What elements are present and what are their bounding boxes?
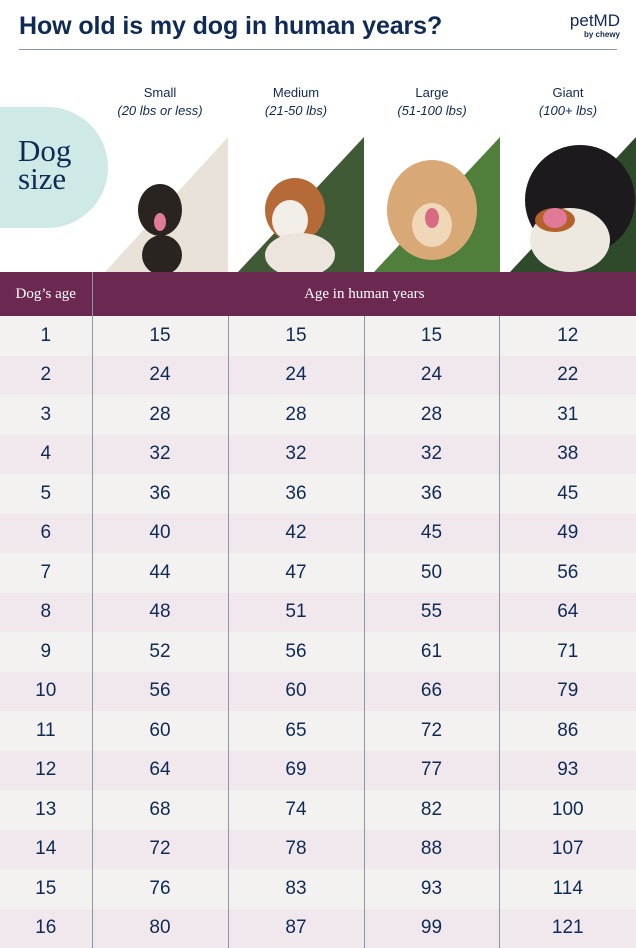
age table: 55 [421,601,442,622]
size label: medium: Medium [273,85,319,100]
age table: 48 [149,601,171,622]
age table: 22 [557,364,578,385]
age table: 100 [552,799,584,820]
age table: 15 [421,325,442,346]
age table: 60 [149,720,171,741]
age table: 66 [421,680,442,701]
age table: 69 [285,759,307,780]
size label: medium [265,85,327,118]
dog photos [105,137,636,272]
age table: 56 [285,641,307,662]
age table: 83 [285,878,307,899]
age table: 93 [421,878,442,899]
age table: 31 [557,404,578,425]
age table: 45 [557,483,578,504]
age table: 99 [421,917,442,938]
age table: 74 [285,799,307,820]
age table: 47 [285,562,307,583]
age table: 24 [285,364,307,385]
age table: 60 [285,680,307,701]
age table: 5 [40,483,51,504]
age table: 71 [557,641,578,662]
age table: 45 [421,522,442,543]
age table: 64 [149,759,171,780]
age table: 36 [149,483,171,504]
age table: 72 [421,720,442,741]
age table: 10 [35,680,56,701]
size label: giant: Giant [552,85,584,100]
size label: small [117,85,203,118]
size label: small: (20 lbs or less) [117,103,203,118]
age table: 24 [421,364,442,385]
age table: 107 [552,838,584,859]
size label: giant [539,85,597,118]
age table: 15 [149,325,171,346]
age table: 50 [421,562,442,583]
age table: 3 [40,404,51,425]
size label: large [397,85,467,118]
age table: 15 [285,325,307,346]
age table: 68 [149,799,171,820]
age table: 13 [35,799,56,820]
age table: 2 [40,364,51,385]
size label: large: Large [415,85,449,100]
age table: 28 [421,404,442,425]
age table: 87 [285,917,307,938]
age table: 42 [285,522,307,543]
age table: 77 [421,759,442,780]
age table: 12 [557,325,578,346]
age table: 61 [421,641,442,662]
title: How old is my dog in human years? [19,12,442,40]
dog size badge: size [18,161,66,196]
age table: 9 [40,641,51,662]
age table: 28 [285,404,307,425]
age table: 76 [149,878,171,899]
age table: 49 [557,522,578,543]
age table: 32 [285,443,307,464]
size label: medium: (21-50 lbs) [265,103,327,118]
age table: 65 [285,720,307,741]
dog size badge [0,107,108,228]
age table: 88 [421,838,442,859]
logo: petMD [570,11,620,30]
age table: 72 [149,838,171,859]
age table: 6 [40,522,51,543]
age table: 38 [557,443,578,464]
age table: 12 [35,759,56,780]
age table: 44 [149,562,171,583]
dog size badge: Dog [18,133,71,168]
age table: 4 [40,443,51,464]
age table: 56 [557,562,578,583]
age table: 32 [149,443,171,464]
age table: 14 [35,838,56,859]
age table: 36 [285,483,307,504]
age table: 78 [285,838,307,859]
age table: 16 [35,917,56,938]
size label: giant: (100+ lbs) [539,103,597,118]
age table: 86 [557,720,578,741]
age table: 28 [149,404,171,425]
age table: 56 [149,680,171,701]
age table: 93 [557,759,578,780]
age table: 79 [557,680,578,701]
age table: 52 [149,641,171,662]
age table: 7 [40,562,51,583]
logo: by chewy [584,30,620,39]
age table: 8 [40,601,51,622]
age table: 80 [149,917,171,938]
age table: 1 [40,325,51,346]
size label: small: Small [144,85,176,100]
age table: 36 [421,483,442,504]
age table: 40 [149,522,171,543]
age table: Dog’s age [16,286,76,302]
age table: 82 [421,799,442,820]
age table: 32 [421,443,442,464]
logo [570,11,620,39]
age table: 11 [36,720,56,741]
size label: large: (51-100 lbs) [397,103,467,118]
age table: 51 [285,601,307,622]
age table [0,272,636,948]
age table: 64 [557,601,578,622]
age table: 24 [149,364,171,385]
age table: 121 [552,917,584,938]
age table: 114 [553,878,583,899]
age table: Age in human years [304,286,424,302]
age table: 15 [35,878,56,899]
